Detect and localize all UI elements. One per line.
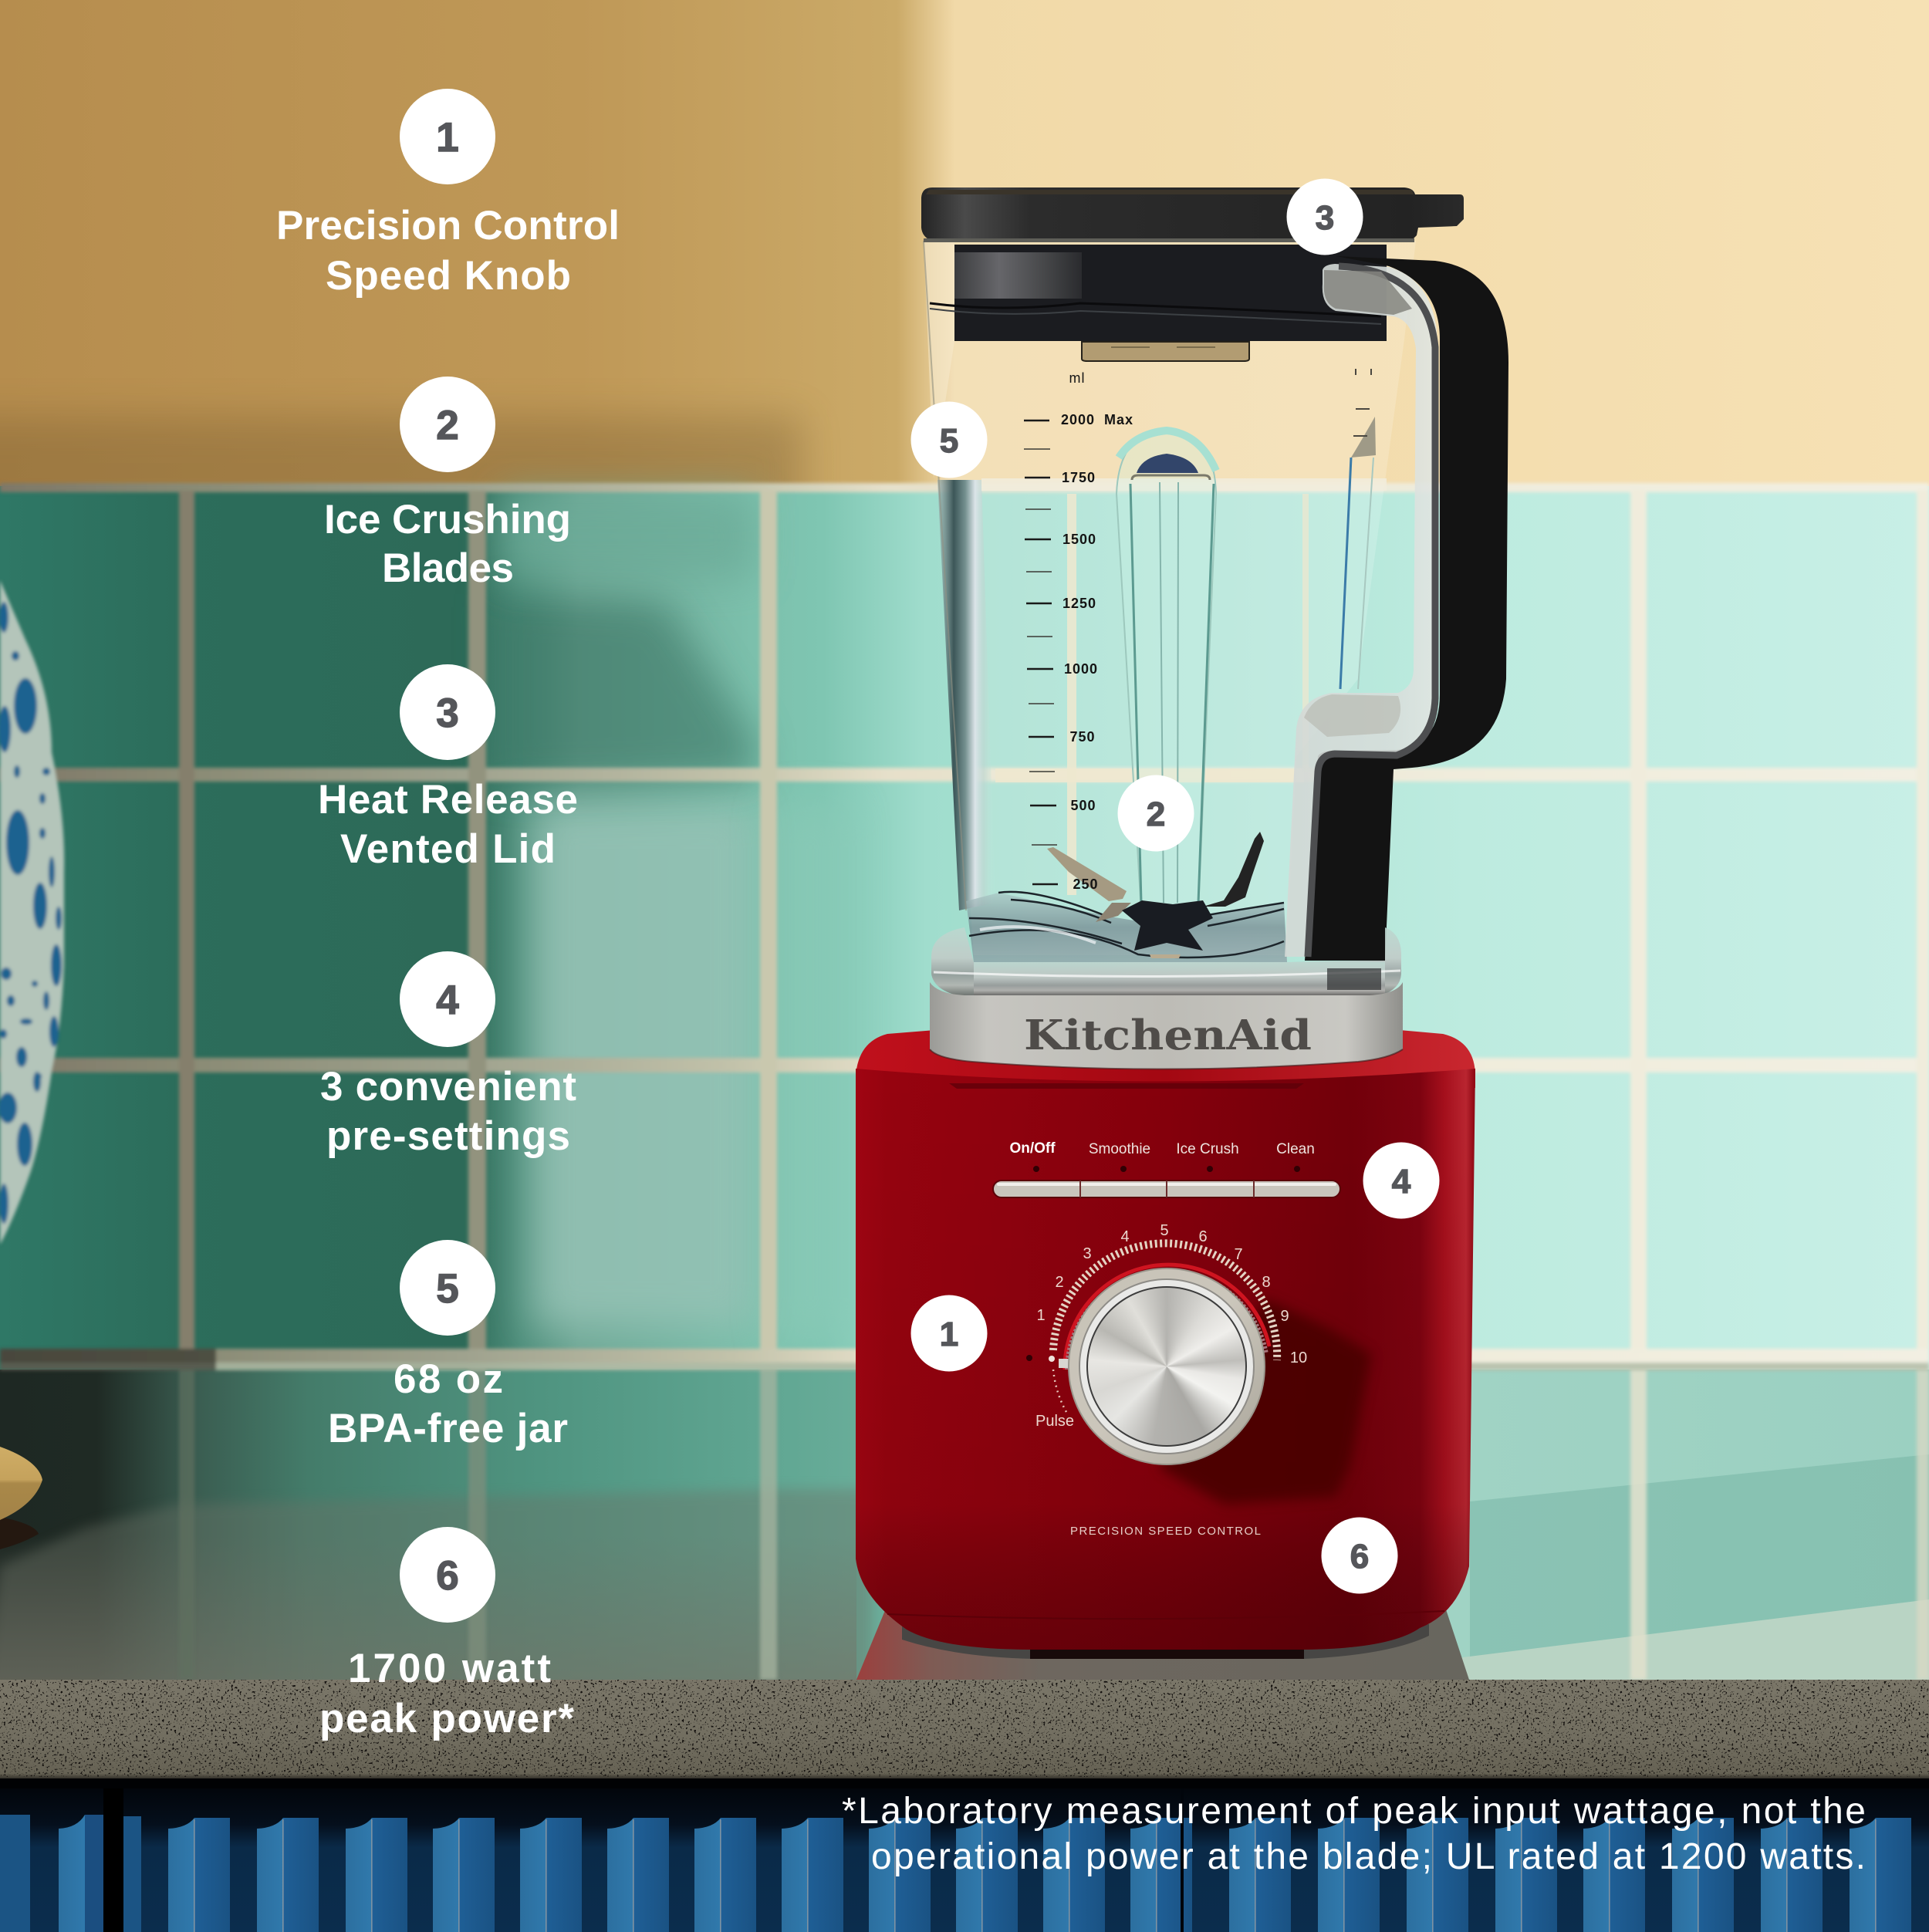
icon: blue patterned vase	[0, 580, 64, 1245]
jar measurement scale: 750	[1069, 729, 1096, 745]
speed dial numbers: 10	[1290, 1349, 1307, 1366]
feature 5: BPA-free jar	[328, 1406, 568, 1451]
pulse dotted arc	[1026, 1355, 1066, 1412]
jar glass	[924, 241, 1416, 955]
counter edge with speckled stone	[0, 1680, 1929, 1778]
speed dial tick ring	[1053, 1243, 1277, 1360]
speed dial numbers: 4	[1120, 1228, 1130, 1245]
speed dial numbers: 8	[1262, 1274, 1271, 1291]
blue fluted cabinet	[0, 1778, 1929, 1932]
jar measurement scale: 1000	[1064, 661, 1098, 677]
feature 5: 68 oz	[394, 1356, 503, 1402]
speed dial numbers: 1	[1036, 1307, 1046, 1324]
reflection of blender on counter	[856, 1605, 1469, 1680]
callout 6: motor: 6	[1350, 1538, 1369, 1576]
preset button labels: On/Off	[1009, 1140, 1056, 1157]
KitchenAid logo: KitchenAid	[1024, 1012, 1312, 1059]
callout 4: presets: 4	[1392, 1163, 1411, 1201]
feature 5	[328, 1240, 568, 1451]
callout 1: knob	[910, 1295, 988, 1372]
feature 3: 3	[436, 691, 459, 736]
feature 3: Vented Lid	[340, 826, 556, 872]
feature 2: Blades	[382, 545, 514, 591]
feature 2: 2	[436, 403, 459, 448]
preset button indicator lights	[1033, 1166, 1300, 1172]
speed dial numbers: 9	[1280, 1308, 1289, 1325]
handle black grip	[1305, 256, 1508, 961]
feature 3: Heat Release	[318, 777, 578, 822]
knob brushed metal cap	[1088, 1288, 1245, 1445]
callout 3: lid	[1287, 179, 1363, 255]
background: yellow wall	[0, 0, 1929, 525]
jar handle	[1285, 256, 1508, 961]
feature 1: Speed Knob	[326, 253, 571, 299]
knob pointer	[1059, 1359, 1074, 1368]
feature 4: 3 convenient	[320, 1064, 576, 1110]
feature 6: 1700 watt	[348, 1646, 551, 1691]
footnote	[842, 1791, 1866, 1877]
callout 6: motor	[1321, 1517, 1398, 1594]
icon: wooden bowl edge	[0, 1447, 42, 1549]
feature 1	[276, 89, 620, 299]
blender feet	[902, 1624, 1429, 1659]
feature 6: 6	[436, 1553, 459, 1599]
jar measurement scale: Max	[1104, 412, 1133, 427]
feature 2: Ice Crushing	[324, 497, 571, 542]
speed dial numbers	[1036, 1222, 1307, 1366]
blender callouts	[910, 179, 1440, 1594]
jar blade tower column	[1117, 429, 1216, 912]
knob toothed collar	[1068, 1272, 1265, 1370]
jar base thick glass	[966, 892, 1287, 962]
feature 4	[320, 951, 576, 1159]
jar measurement scale: 1500	[1062, 532, 1096, 547]
background: stone counter top	[0, 1370, 1929, 1697]
feature 5: 5	[436, 1266, 459, 1312]
callout 5: jar	[910, 401, 988, 478]
feature 6	[319, 1527, 574, 1741]
speed dial numbers: 6	[1198, 1228, 1208, 1245]
callout 1: knob: 1	[940, 1316, 958, 1353]
speed dial numbers: 3	[1083, 1245, 1092, 1262]
jar measurement scale: ml	[1069, 370, 1085, 386]
feature 4: pre-settings	[326, 1113, 570, 1159]
footnote: operational power at the blade; UL rated at 1200 watts.	[871, 1836, 1866, 1877]
callout 4: presets	[1363, 1142, 1440, 1219]
feature 4: 4	[436, 978, 459, 1023]
precision speed control label: PRECISION SPEED CONTROL	[1070, 1525, 1261, 1538]
jar measurement scale: 1750	[1062, 470, 1096, 485]
preset button labels: Clean	[1276, 1141, 1315, 1157]
callout 3: lid: 3	[1316, 199, 1334, 237]
callout 2: blades: 2	[1147, 795, 1165, 833]
feature 3	[318, 664, 578, 872]
jar measurement scale: 1250	[1062, 596, 1096, 611]
jar pour tube	[1340, 417, 1376, 689]
feature 1: 1	[436, 115, 459, 160]
jar lid	[921, 187, 1464, 242]
knob red rim	[1065, 1265, 1269, 1370]
speed dial numbers: 7	[1234, 1246, 1243, 1263]
knob silver ring	[1069, 1268, 1265, 1464]
callout 2: blades	[1117, 775, 1194, 852]
pulse label: Pulse	[1035, 1413, 1074, 1430]
jar measurement scale: 250	[1073, 876, 1099, 892]
blender red motor base	[856, 1028, 1475, 1650]
feature 6: peak power*	[319, 1696, 574, 1741]
jar measurement scale	[1024, 370, 1133, 892]
footnote: *Laboratory measurement of peak input wattage, not the	[842, 1791, 1866, 1832]
preset button labels	[1009, 1140, 1315, 1157]
feature 2	[324, 377, 571, 591]
callout 5: jar: 5	[940, 422, 958, 460]
speed dial numbers: 5	[1160, 1222, 1169, 1239]
jar measurement scale: 2000	[1061, 412, 1095, 427]
jar measurement scale: 500	[1070, 798, 1096, 813]
background: teal tiled wall	[0, 486, 1929, 1373]
speed dial	[1026, 1222, 1307, 1464]
preset button labels: Ice Crush	[1176, 1141, 1239, 1157]
preset button bar	[993, 1180, 1340, 1197]
silver collar with KitchenAid badge	[930, 982, 1403, 1069]
preset button labels: Smoothie	[1089, 1141, 1150, 1157]
speed dial numbers: 2	[1055, 1274, 1064, 1291]
handle silver liner	[1285, 264, 1437, 957]
transparent jar collar	[931, 927, 1401, 995]
feature 1: Precision Control	[276, 203, 620, 248]
ice crushing blades	[1047, 832, 1264, 958]
jar ounce scale marks	[1353, 369, 1371, 436]
wall tile grout lines	[0, 483, 1929, 1680]
feature list	[276, 89, 620, 1741]
blender	[856, 187, 1508, 1659]
jar inner lid	[930, 245, 1387, 361]
